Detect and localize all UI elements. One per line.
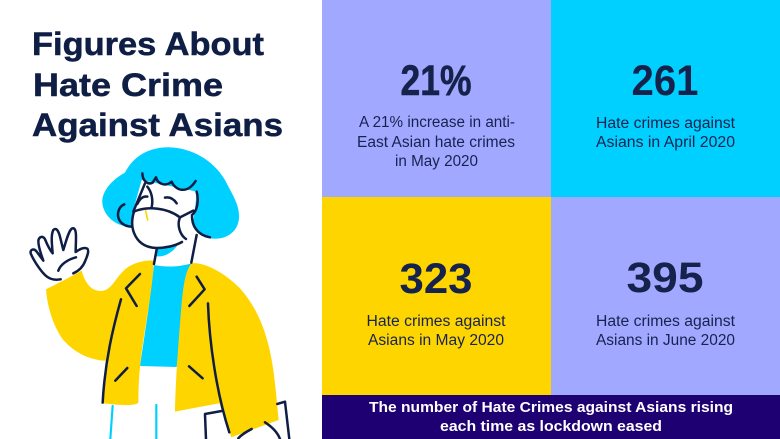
panel: 323: 323 xyxy=(400,255,472,303)
panel: 21% xyxy=(322,0,551,197)
panel: 395: Hate crimes against xyxy=(596,313,736,330)
folder xyxy=(205,411,222,439)
panel: 323: Asians in May 2020 xyxy=(368,332,504,349)
mask strap: yellow xyxy=(146,211,148,220)
hair under chin xyxy=(155,243,179,256)
ear xyxy=(118,204,131,227)
panel: 323 xyxy=(322,197,551,395)
footer banner: The number of Hate Crimes against Asians rising xyxy=(369,400,733,416)
face xyxy=(133,183,145,212)
lapels xyxy=(126,274,140,306)
mask xyxy=(134,208,193,217)
top xyxy=(140,263,191,367)
hand xyxy=(31,228,88,280)
fringe xyxy=(142,173,196,190)
title: Against Asians xyxy=(32,107,283,143)
ink outlines xyxy=(31,173,289,439)
panel: 21%: 21% xyxy=(400,57,472,105)
panel: 21%: in May 2020 xyxy=(395,153,478,170)
jacket lines xyxy=(103,299,121,403)
jacket left xyxy=(46,261,153,405)
panel: 323: Hate crimes against xyxy=(366,313,506,330)
panel: 261: Asians in April 2020 xyxy=(596,134,735,151)
panel: 261: Hate crimes against xyxy=(596,115,736,132)
panel: 261: 261 xyxy=(632,57,698,105)
hair xyxy=(102,147,239,239)
jacket right xyxy=(175,263,279,437)
trouser lines xyxy=(110,405,156,439)
panel: 21%: A 21% increase in anti- xyxy=(359,114,515,131)
panel: 395 xyxy=(551,197,780,395)
footer banner: each time as lockdown eased xyxy=(440,419,662,435)
lower hand xyxy=(265,422,280,439)
footer banner xyxy=(322,395,780,439)
pockets xyxy=(115,368,127,381)
neck xyxy=(154,249,157,264)
title: Hate Crime xyxy=(33,67,223,103)
panel: 395: 395 xyxy=(626,254,704,302)
title xyxy=(32,26,283,143)
illustration: masked woman waving xyxy=(31,147,289,439)
panel: 21%: East Asian hate crimes xyxy=(357,134,515,151)
panel: 261 xyxy=(551,0,780,197)
title: Figures About xyxy=(32,26,264,62)
panel: 395: Asians in June 2020 xyxy=(596,332,735,349)
